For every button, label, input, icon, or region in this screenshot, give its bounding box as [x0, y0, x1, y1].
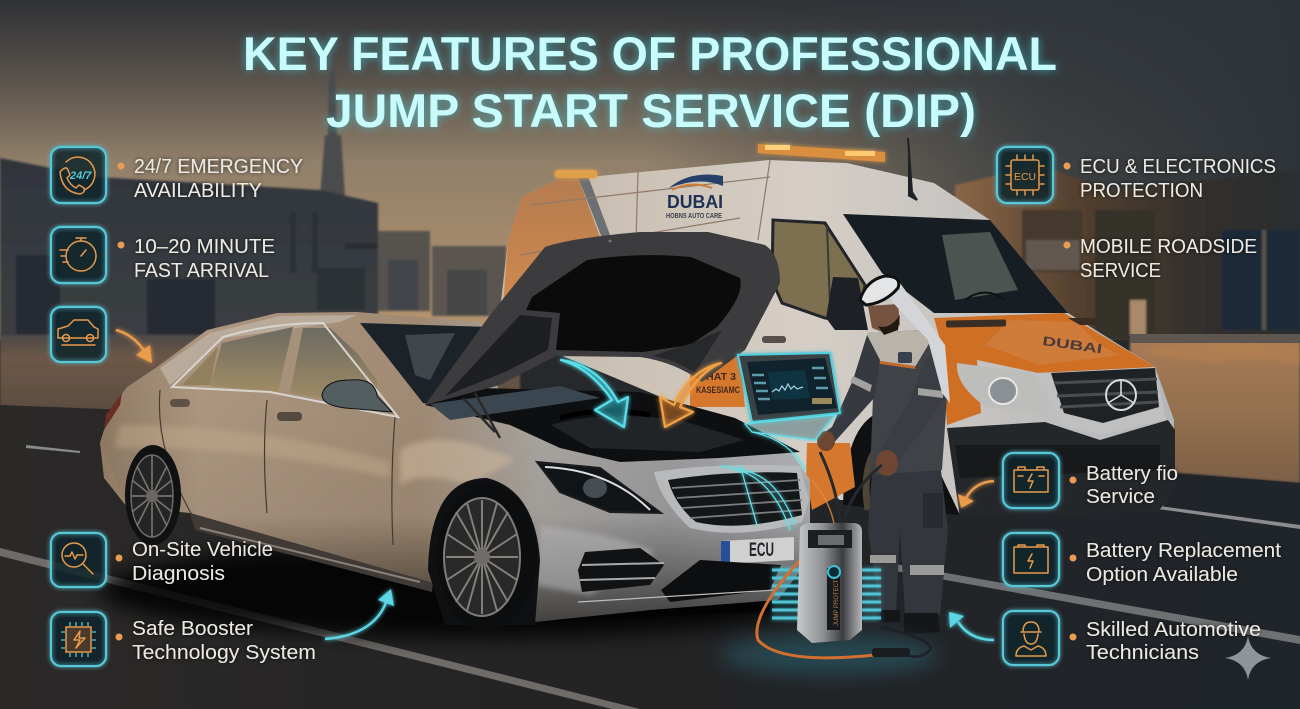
- feature: 24/7 emergency availability: 24/7 EMERGENCY: [134, 155, 303, 178]
- rear wheel: [125, 445, 181, 545]
- icon: car outline: [51, 307, 106, 362]
- car headlight: [537, 462, 661, 513]
- cyan coils right: [862, 570, 881, 618]
- lower bumper: [661, 560, 781, 602]
- front door glass: [290, 328, 378, 402]
- feature: on-site vehicle diagnosis: Diagnosis: [132, 562, 225, 585]
- feature: battery replacement: Battery Replacement: [1086, 539, 1281, 562]
- title: [243, 27, 1057, 137]
- rear door glass: [210, 327, 293, 392]
- car body: [100, 312, 810, 622]
- van orange door panel: [690, 355, 745, 407]
- front wheel: [428, 478, 540, 630]
- feature: battery service: Battery fio: [1086, 462, 1178, 485]
- number plate: ECU: [749, 540, 774, 561]
- feature: mobile roadside service: MOBILE ROADSIDE: [1080, 235, 1257, 258]
- shadow under car: [100, 542, 840, 638]
- van grille: [1038, 367, 1166, 435]
- uniform torso: [867, 330, 947, 475]
- arrow: orange lower right: [958, 481, 994, 508]
- feature: mobile roadside service: SERVICE: [1080, 259, 1161, 282]
- rear window: [182, 347, 218, 385]
- right sand: [1130, 340, 1300, 483]
- arrow: cyan into engine: [561, 360, 628, 427]
- van wheel arch: [843, 410, 960, 515]
- van side window: [772, 220, 865, 322]
- side mirror: [322, 380, 392, 412]
- feature: fast arrival: [51, 227, 275, 283]
- icon: technician: [1003, 611, 1059, 665]
- feature: fast arrival: FAST ARRIVAL: [134, 259, 269, 282]
- service van: DUBAI: [1042, 333, 1103, 356]
- van windshield: [843, 214, 1068, 313]
- van logo: [666, 174, 723, 220]
- windshield: [360, 323, 490, 405]
- engine bay: [425, 388, 800, 462]
- service van: HAT 3: [706, 372, 736, 383]
- arms: [818, 335, 880, 447]
- icon: battery: [1003, 453, 1059, 508]
- boots: [904, 613, 940, 634]
- technician: [817, 276, 950, 634]
- left sand: [0, 335, 520, 413]
- agal and ghutra: [860, 276, 899, 305]
- service van: [500, 138, 1175, 518]
- trousers: [868, 462, 948, 615]
- door handles: [170, 399, 190, 407]
- title: KEY FEATURES OF PROFESSIONAL: [243, 27, 1057, 80]
- icon: ECU chip: [997, 147, 1053, 203]
- feature: safe booster technology: Safe Booster: [132, 617, 253, 640]
- rocker panel: [190, 513, 433, 592]
- sparkle star watermark: [1225, 636, 1271, 680]
- van bumper: [947, 420, 1175, 518]
- feature: skilled technicians: Technicians: [1086, 641, 1199, 664]
- booster cables: [720, 560, 940, 675]
- feature: battery replacement: Option Available: [1086, 563, 1238, 586]
- service van: KASESIAMC: [696, 385, 740, 395]
- feature: battery service: [1003, 453, 1178, 508]
- feature: 24/7 emergency availability: [51, 147, 303, 203]
- number plate: [721, 537, 794, 564]
- chest panel: [867, 330, 930, 367]
- door seams: [159, 390, 395, 545]
- open hood: [425, 232, 780, 405]
- arrow: orange into engine: [660, 363, 721, 427]
- jump starter booster: [797, 523, 862, 643]
- arrow: cyan lower right: [949, 612, 994, 640]
- hands: [817, 431, 835, 451]
- arrow: cyan lower left: [325, 589, 394, 639]
- feature: fast arrival: 10–20 MINUTE: [134, 235, 275, 258]
- cyan energy lines: [720, 415, 835, 530]
- dark clamp cable: [820, 452, 882, 528]
- icon: magnifier pulse: [51, 533, 106, 587]
- feature: on-site vehicle diagnosis: On-Site Vehicle: [132, 538, 273, 561]
- feature: safe booster technology: [51, 612, 316, 666]
- rear light: [104, 393, 122, 430]
- lower intake: [578, 548, 664, 592]
- cyan coils left: [772, 570, 810, 618]
- jump starter booster: JUMP PROTECT: [834, 579, 840, 626]
- feature: ECU protection: PROTECTION: [1080, 179, 1203, 202]
- car grille: [654, 465, 809, 533]
- road: [0, 405, 1300, 709]
- van headlight: [957, 363, 1051, 415]
- silver sedan: [100, 232, 810, 630]
- van door handle: [762, 336, 786, 343]
- van logo: HOBNS AUTO CARE: [666, 211, 722, 220]
- icon: phone 24/7: 24/7: [69, 170, 92, 182]
- orange door lower: [806, 443, 855, 510]
- body highlight: [115, 425, 390, 478]
- feature: ECU protection: [997, 147, 1276, 203]
- icon: phone 24/7: [51, 147, 106, 203]
- roof highlight: [160, 315, 357, 385]
- feature: battery replacement: [1003, 533, 1281, 586]
- icon: ECU chip: ECU: [1014, 172, 1036, 183]
- van mirror: [826, 277, 868, 330]
- icon: battery replacement: [1003, 533, 1059, 586]
- amber roof lights: [555, 144, 885, 178]
- uniform badge: [898, 352, 912, 363]
- van hood orange: [934, 313, 1155, 425]
- icon: stopwatch: [51, 227, 106, 283]
- feature: 24/7 emergency availability: AVAILABILITY: [134, 179, 262, 202]
- left buildings: [0, 158, 506, 340]
- van body: [500, 160, 1174, 515]
- van logo: DUBAI: [667, 192, 723, 212]
- face: [868, 304, 900, 333]
- feature: on-site vehicle diagnosis: [51, 533, 273, 587]
- tower: [320, 70, 345, 197]
- feature: safe booster technology: Technology System: [132, 641, 316, 664]
- feature: skilled technicians: Skilled Automotive: [1086, 618, 1261, 641]
- window trim: [172, 323, 398, 417]
- arrow: orange left: [116, 330, 152, 363]
- right building: [955, 165, 1300, 340]
- headscarf: [885, 283, 950, 403]
- feature: skilled technicians: [1003, 611, 1261, 665]
- feature: mobile roadside service: [1064, 235, 1257, 282]
- orange cable to grille: [812, 480, 835, 528]
- title: JUMP START SERVICE (DIP): [326, 84, 976, 137]
- feature: ECU protection: ECU & ELECTRONICS: [1080, 155, 1276, 178]
- icon: chip bolt: [51, 612, 106, 666]
- van rear orange: [502, 177, 606, 340]
- diagnostic tablet: [738, 353, 840, 422]
- feature: battery service: Service: [1086, 485, 1155, 508]
- antenna: [908, 138, 917, 200]
